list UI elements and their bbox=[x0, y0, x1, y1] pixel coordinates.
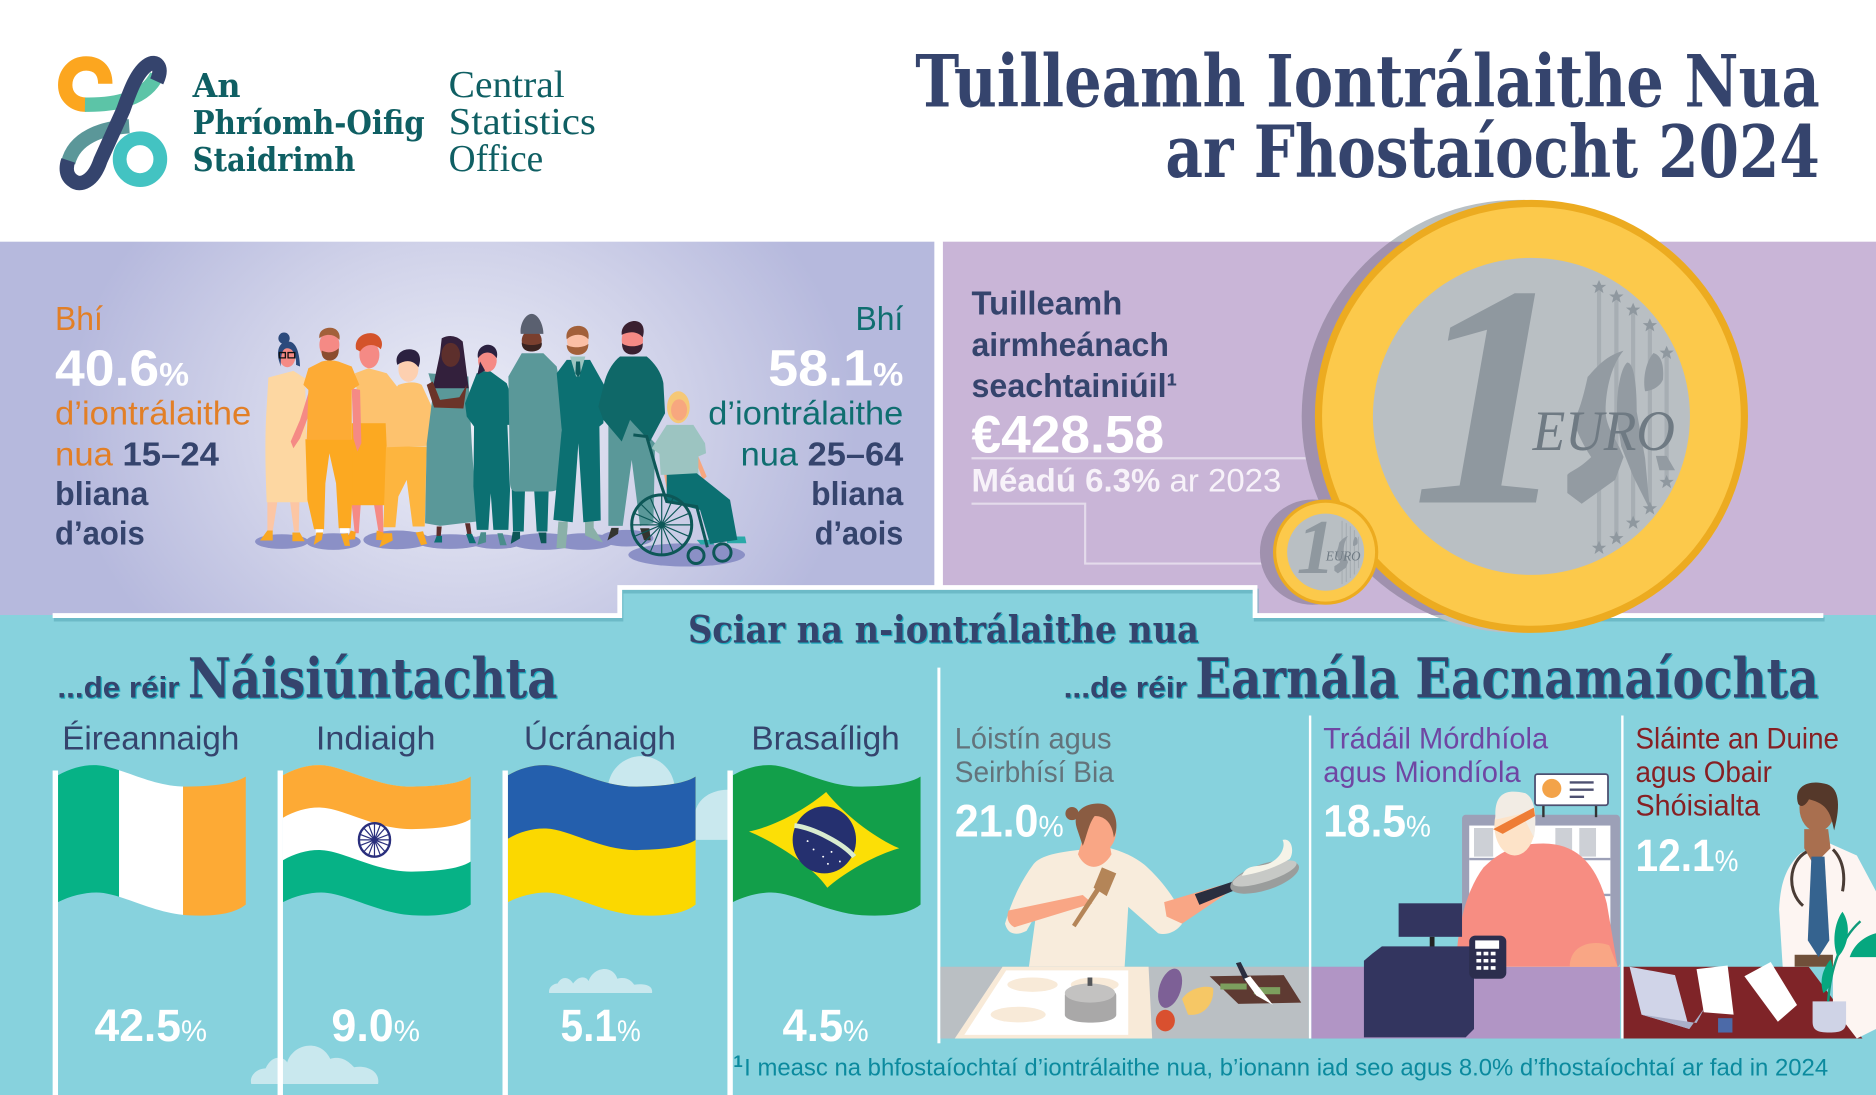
person 3: red hair bbox=[347, 333, 398, 541]
panel: wholesale and retail: Trádáil Mórdhíola bbox=[1323, 722, 1549, 755]
logo: Irish wordmark: An bbox=[192, 67, 240, 105]
chart: Ukrainian share bbox=[502, 720, 697, 1095]
text: average weekly earnings: airmheánach bbox=[972, 327, 1169, 364]
logo: English wordmark: Office bbox=[449, 138, 543, 180]
illustration: group of people bbox=[255, 314, 746, 567]
chart: Irish share: 42.5% bbox=[95, 1000, 207, 1051]
chart: Indian share: Indiaigh bbox=[316, 721, 436, 758]
chart: Brazilian share bbox=[727, 721, 922, 1095]
logo: Irish wordmark bbox=[192, 67, 425, 179]
illustration: doctor bbox=[1779, 782, 1876, 1039]
panel: health and social work bbox=[1624, 722, 1876, 1039]
text: ages 25-64: Bhí bbox=[855, 301, 904, 338]
chart: Ukrainian share: 5.1% bbox=[561, 1000, 641, 1051]
text: ages 15-24: d’iontrálaithe bbox=[55, 396, 251, 433]
person 1: woman in pale dress bbox=[260, 333, 308, 541]
heading: by nationality: ...de réir bbox=[57, 672, 180, 705]
panel: health and social work: 12.1% bbox=[1636, 830, 1738, 881]
divider between panels bbox=[934, 242, 943, 589]
person 8: man in suit bbox=[553, 326, 605, 548]
person 5: woman in teal dress bbox=[425, 336, 477, 543]
divider between nationality and sector bbox=[937, 668, 940, 1043]
text: ages 15-24: d’aois bbox=[55, 515, 145, 552]
text: ages 25-64: d’iontrálaithe bbox=[708, 396, 903, 433]
logo: English wordmark: Central bbox=[449, 64, 565, 106]
panel: wholesale and retail bbox=[1311, 722, 1620, 1039]
text: ages 25-64: bliana bbox=[811, 476, 904, 513]
panel: wholesale and retail: agus Miondíola bbox=[1323, 756, 1521, 789]
illustration: till and card reader bbox=[1364, 903, 1506, 1037]
sector dividers bbox=[1310, 715, 1622, 1039]
person 4: young man bbox=[378, 349, 436, 547]
illustration: chef bbox=[1005, 804, 1303, 967]
panel: health and social work: Sláinte an Duine bbox=[1636, 722, 1839, 755]
text: ages 15-24: 40.6% bbox=[55, 338, 189, 396]
logo: Irish wordmark: Staidrimh bbox=[193, 141, 355, 179]
illustration: stove and vegetables bbox=[955, 962, 1301, 1039]
icon: large euro coin: 1 bbox=[1412, 220, 1570, 572]
text: ages 15-24 bbox=[55, 301, 251, 552]
panel: health and social work: agus Obair bbox=[1636, 756, 1772, 789]
heading: by economic sector: ...de réir bbox=[1064, 672, 1187, 705]
footnote: I measc na bhfostaíochtaí d’iontrálaithe nua, b’ionann iad seo agus 8.0% d’fhostaíochtaí ar fad in 2024 bbox=[744, 1055, 1828, 1082]
illustration: desk items and plant bbox=[1630, 912, 1876, 1033]
illustration: shop shelf bbox=[1462, 774, 1620, 967]
title bbox=[915, 39, 1820, 194]
person 2: man in orange bbox=[291, 328, 361, 546]
panel: accommodation and food: Seirbhísí Bia bbox=[955, 756, 1114, 789]
chart: Brazilian share: Brasaíligh bbox=[751, 721, 900, 758]
text: average weekly earnings: Méadú 6.3% ar 2023 bbox=[972, 463, 1281, 499]
logo: CSO mark bbox=[65, 63, 160, 183]
person 9: man in green jumper bbox=[598, 321, 665, 541]
text: ages 25-64: nua 25–64 bbox=[741, 436, 904, 473]
text: ages 15-24: bliana bbox=[55, 476, 149, 513]
panel: accommodation and food: Lóistín agus bbox=[955, 722, 1111, 755]
text: ages 25-64: 58.1% bbox=[768, 338, 903, 396]
panel: share of new entrants background bbox=[0, 589, 1876, 1095]
heading: by nationality bbox=[57, 646, 558, 711]
panel: accommodation and food bbox=[940, 722, 1309, 1039]
icon: small euro coin: EURO bbox=[1325, 549, 1361, 564]
chart: Ukrainian share: Úcránaigh bbox=[524, 720, 676, 758]
panel: accommodation and food: 21.0% bbox=[955, 795, 1064, 846]
chart: Irish share bbox=[53, 721, 246, 1095]
chart: Indian share: 9.0% bbox=[331, 1000, 420, 1051]
icon: small euro coin: 1 bbox=[1297, 504, 1335, 590]
panel: health and social work: Shóisialta bbox=[1636, 789, 1760, 822]
chart: Irish share: Éireannaigh bbox=[62, 721, 239, 758]
chart: Indian share bbox=[278, 712, 472, 1095]
chart: Brazilian share: 4.5% bbox=[782, 1000, 869, 1051]
icon: large euro coin bbox=[1302, 200, 1748, 633]
logo: English wordmark: Statistics bbox=[449, 101, 596, 143]
decorative clouds bbox=[251, 756, 730, 1084]
person 6: woman in dark teal bbox=[465, 345, 516, 545]
logo: Irish wordmark: Phríomh-Oifig bbox=[193, 104, 425, 142]
footnote: 1 bbox=[733, 1052, 743, 1071]
share heading frame bbox=[53, 587, 1825, 619]
heading: share of new entrants: Sciar na n-iontrálaithe nua bbox=[688, 607, 1199, 651]
rule under earnings value bbox=[972, 458, 1322, 564]
person 7: man in grey coat and hat bbox=[508, 314, 563, 544]
text: ages 25-64: d’aois bbox=[815, 515, 903, 552]
text: average weekly earnings: Tuilleamh bbox=[972, 286, 1122, 323]
panel: age groups background bbox=[0, 242, 934, 619]
panel: wholesale and retail: 18.5% bbox=[1323, 795, 1431, 846]
text: ages 25-64 bbox=[708, 301, 904, 552]
person 10: woman in wheelchair bbox=[632, 391, 746, 564]
text: average weekly earnings: €428.58 bbox=[972, 405, 1164, 464]
text: ages 15-24: Bhí bbox=[55, 301, 104, 338]
panel: earnings background bbox=[943, 242, 1876, 619]
icon: small euro coin bbox=[1260, 500, 1378, 605]
text: average weekly earnings: seachtainiúil¹ bbox=[972, 368, 1177, 405]
heading: by nationality: Náisiúntachta bbox=[188, 646, 558, 711]
text: average weekly earnings bbox=[972, 286, 1281, 499]
logo: English wordmark bbox=[449, 64, 596, 180]
icon: large euro coin: EURO bbox=[1532, 400, 1675, 463]
text: ages 15-24: nua 15–24 bbox=[55, 436, 219, 473]
illustration: cashier bbox=[1456, 792, 1618, 967]
